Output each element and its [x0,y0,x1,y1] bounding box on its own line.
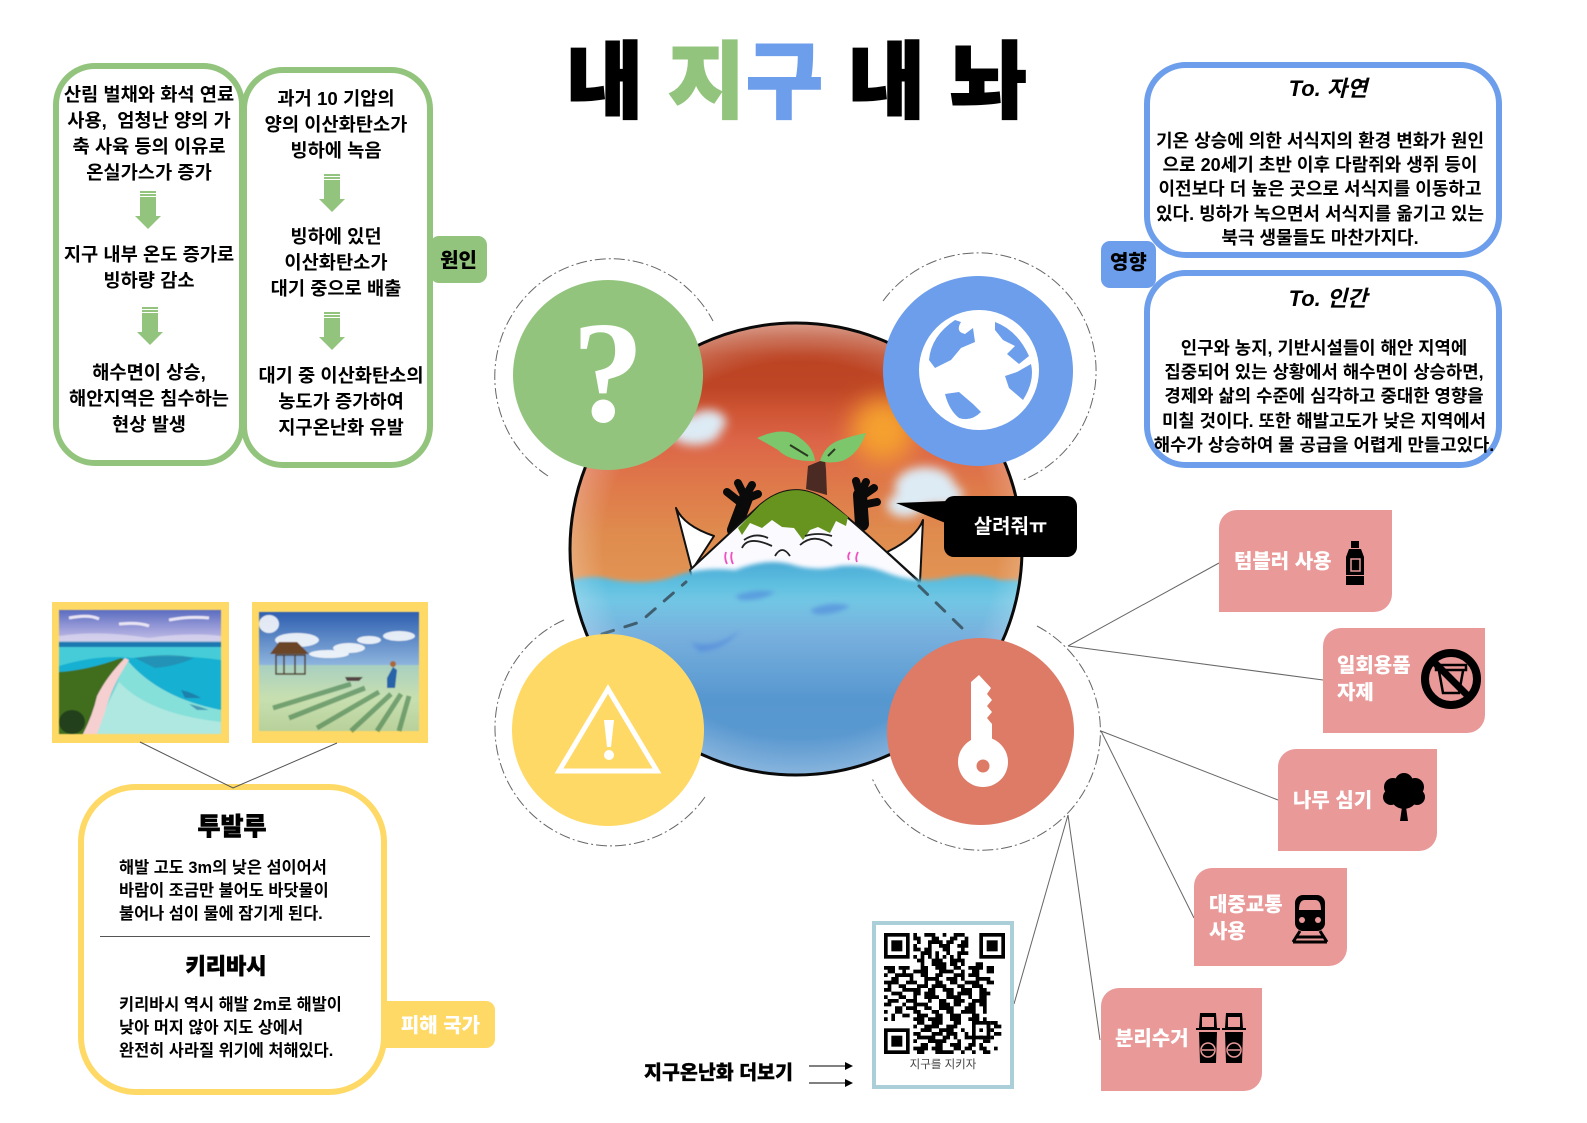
callout tail [896,501,946,522]
text: temperature: 빙하량 감소 [103,270,195,291]
text: kiribati [119,996,342,1060]
sea [574,558,1018,774]
panel: affected countries tag: 피해 국가 [401,1015,480,1037]
submerged dashes [602,582,964,634]
label [1209,894,1283,943]
label: see more: 지구온난화 더보기 [644,1062,793,1084]
action: public transit [1194,868,1347,966]
text: carbon release: 빙하에 있던 [290,226,382,247]
text: deforestation [64,84,234,183]
text: kiribati: 키리바시 역시 해발 2m로 해발이 [119,996,342,1014]
body text: 집중되어 있는 상황에서 해수면이 상승하면, [1164,362,1484,382]
arrow [135,191,161,229]
label: 분리수거 [1115,1028,1189,1050]
body text: 있다. 빙하가 녹으면서 서식지를 옮기고 있는 [1156,204,1484,224]
body text: 인구와 농지, 기반시설들이 해안 지역에 [1181,338,1467,358]
trunk [806,459,827,495]
text: sea level: 해수면이 상승, [92,362,206,383]
text: kiribati: 낮아 머지 않아 지도 상에서 [119,1019,303,1037]
heading: tuvalu: 투발루 [197,813,267,841]
body text: 경제와 삶의 수준에 심각하고 중대한 영향을 [1164,386,1484,406]
text: deforestation: 산림 벌채와 화석 연료 [64,84,234,105]
ears [676,508,923,582]
qr caption: 지구를 지키자 [910,1059,976,1071]
label: 자제 [1337,682,1374,704]
body text: 해수가 상승하여 물 공급을 어렵게 만들고있다. [1154,435,1494,455]
text: carbon release: 대기 중으로 배출 [271,278,401,299]
label: 일회용품 [1337,655,1411,677]
body text: 으로 20세기 초반 이후 다람쥐와 생쥐 등이 [1162,155,1478,175]
icon: train [1292,895,1328,944]
body text [1154,338,1494,455]
heading: kiribati: 키리바시 [186,954,266,979]
text: deforestation: 축 사육 등의 이유로 [72,136,226,157]
arrow [137,307,163,345]
body text: 미칠 것이다. 또한 해발고도가 낮은 지역에서 [1162,411,1486,431]
icon: question circle [513,280,703,470]
leaves [757,432,815,461]
callout bubble [944,496,1077,557]
panel: causes tag [430,236,487,283]
photo: kiribati shallows [252,602,428,743]
arrow [319,312,345,350]
body text: 이전보다 더 높은 곳으로 서식지를 이동하고 [1158,179,1482,199]
action: tumbler [1219,510,1392,612]
body text: 북극 생물들도 마찬가지다. [1221,228,1419,248]
icon: question circle: ? [572,293,644,453]
text: warming: 대기 중 이산화탄소의 [258,365,424,386]
label: 대중교통 [1209,894,1283,916]
callout bubble: 살려줘ㅠ [974,516,1047,538]
title: 내 지구 내 놔 [566,35,1028,129]
qr code card [872,921,1014,1089]
text: tuvalu: 해발 고도 3m의 낮은 섬이어서 [119,859,327,877]
icon: warning circle [512,634,704,826]
icon: bottle [1346,541,1364,585]
action: avoid disposables [1323,628,1485,733]
action: plant trees [1278,749,1437,851]
text: ice age carbon: 빙하에 녹음 [290,140,382,161]
text: temperature [64,244,234,291]
heading: To. 인간 [1289,286,1367,311]
label: 나무 심기 [1293,790,1372,812]
text: sea level: 현상 발생 [112,414,186,435]
icon: key circle [887,638,1074,825]
icon: recycling bins [1196,1013,1246,1063]
text: tuvalu: 불어나 섬이 물에 잠기게 된다. [119,905,323,923]
qr code [884,933,1005,1054]
text: carbon release: 이산화탄소가 [284,252,388,273]
callout: save me [896,496,1077,557]
divider [100,936,370,937]
text: ice age carbon: 양의 이산화탄소가 [265,114,407,135]
face [742,534,832,556]
arrow [319,174,345,212]
text: ice age carbon [265,88,407,161]
label [1337,655,1411,704]
photo: tuvalu aerial [52,602,229,743]
panel: cause chain 1 [53,63,245,466]
text: temperature: 지구 내부 온도 증가로 [64,244,234,265]
icon: no cup [1421,649,1481,709]
panel: effects tag [1101,241,1156,288]
panel: effects tag: 영향 [1110,252,1147,274]
panel: cause chain 2 [241,67,433,468]
mountain body [688,489,920,584]
text: sea level [69,362,229,435]
icon: tree [1383,773,1425,821]
label: 사용 [1209,921,1246,943]
heading: To. 자연 [1289,76,1367,101]
text: deforestation: 사용, 엄청난 양의 가 [67,110,231,131]
panel: affected countries tag [386,1001,495,1048]
icon: globe circle [883,276,1073,466]
arrows to qr [809,1062,853,1087]
panel: to humans [1144,270,1502,468]
action: recycling [1101,988,1262,1091]
text: warming: 지구온난화 유발 [278,417,404,438]
label: 텀블러 사용 [1234,551,1332,573]
panel: causes tag: 원인 [440,250,477,272]
text: warming: 농도가 증가하여 [278,391,404,412]
text: carbon release [271,226,401,299]
text: ice age carbon: 과거 10 기압의 [277,88,395,109]
panel: to nature [1144,62,1502,258]
text: tuvalu: 바람이 조금만 불어도 바닷물이 [119,882,329,900]
text: deforestation: 온실가스가 증가 [86,162,212,183]
panel: affected countries [78,784,387,1095]
body text: 기온 상승에 의한 서식지의 환경 변화가 원인 [1156,131,1484,151]
photo connector lines [140,742,338,788]
text: sea level: 해안지역은 침수하는 [69,388,229,409]
central illustration: drowning earth character [568,322,1024,776]
text: tuvalu [119,859,329,923]
text: kiribati: 완전히 사라질 위기에 처해있다. [119,1042,333,1060]
text: warming [258,365,424,438]
hands [727,481,877,530]
body text [1156,131,1484,248]
